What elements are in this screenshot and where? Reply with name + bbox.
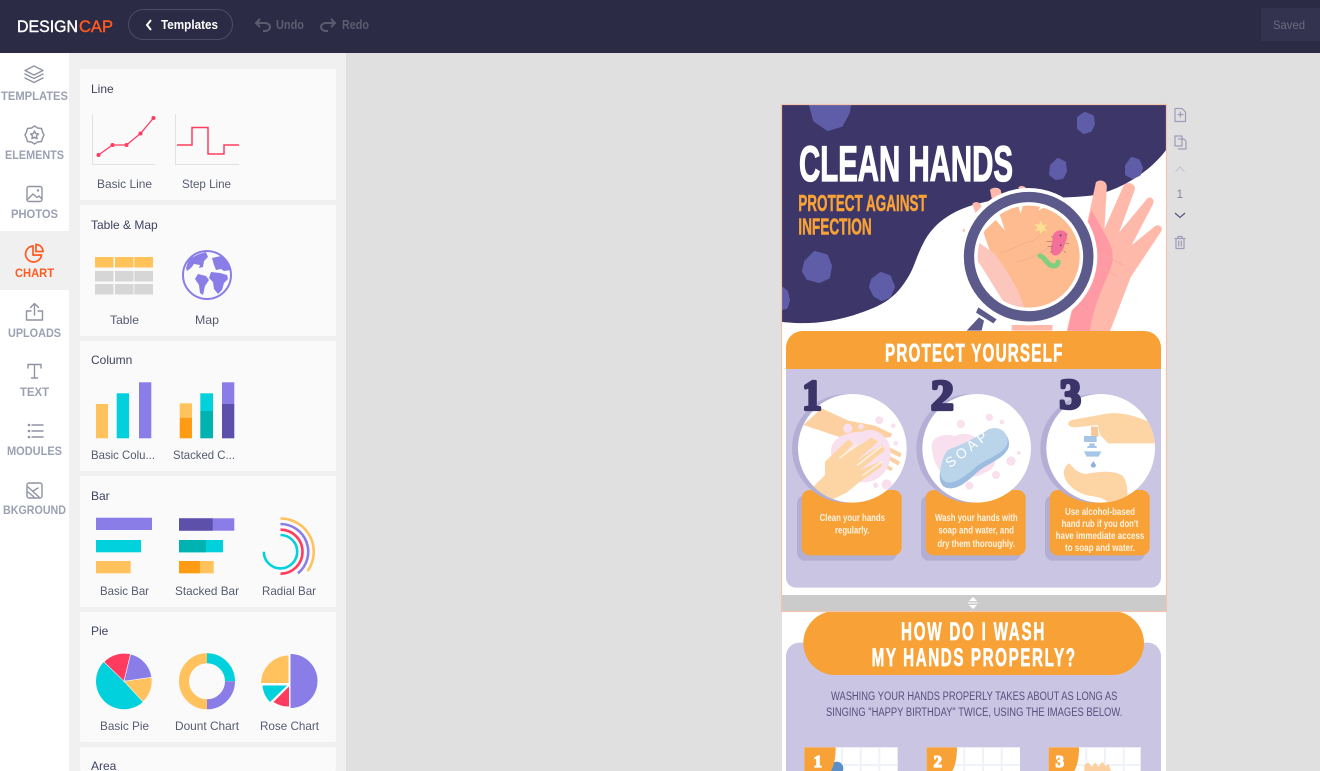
undo [256, 18, 304, 32]
nav: elements: ELEMENTS [5, 148, 64, 162]
icon: move up [1176, 167, 1184, 172]
basic line chart: Basic Line [97, 177, 152, 191]
panel: bar charts: Bar [91, 489, 110, 503]
basic bar chart [96, 518, 152, 598]
numeral: 2 [931, 372, 954, 419]
stacked column chart [173, 382, 235, 462]
magnifying glass [960, 186, 1097, 331]
numeral: 1 [802, 372, 822, 419]
basic line chart [92, 114, 239, 191]
nav: templates: TEMPLATES [1, 89, 68, 103]
stacked bar chart: Stacked Bar [175, 584, 239, 598]
step tile 2 [927, 747, 1020, 771]
donut chart [175, 658, 240, 733]
panel: column charts [80, 341, 336, 471]
basic pie chart [96, 653, 152, 733]
chart type panel [69, 53, 346, 771]
fingertips behind lens [962, 186, 1026, 233]
step tile 1: 1 [814, 752, 822, 771]
panel: line charts: Line [91, 82, 114, 96]
table icon [95, 257, 153, 327]
redo [321, 18, 369, 32]
caption: hand rub if you don't [1062, 519, 1139, 530]
map globe icon [183, 251, 231, 327]
table icon: Table [110, 313, 139, 327]
panel: column charts: Column [91, 353, 132, 367]
nav: templates [1, 66, 68, 103]
nav: chart active [15, 244, 55, 280]
radial bar chart [262, 518, 316, 598]
orange pill heading: HOW DO I WASH [901, 618, 1044, 646]
caption [820, 513, 885, 537]
nav: background [3, 483, 66, 517]
subtitle [799, 194, 927, 235]
title: CLEAN HANDS [799, 136, 1013, 192]
logo: DESIGN [17, 17, 78, 36]
panel: protect yourself [786, 331, 1161, 588]
nav: text: TEXT [20, 385, 50, 399]
step tile 2: 2 [934, 752, 942, 771]
templates button: Templates [161, 18, 218, 32]
orange pill heading: MY HANDS PROPERLY? [872, 644, 1075, 672]
step line chart [177, 128, 239, 191]
step tile 1 [804, 747, 898, 771]
caption [1056, 507, 1145, 554]
icon: sanitizer hands [1064, 413, 1157, 506]
saved status: Saved [1273, 18, 1305, 32]
caption [935, 513, 1018, 550]
step tile 3: 3 [1056, 752, 1064, 771]
icon: add page [1175, 108, 1186, 122]
subtitle: PROTECT AGAINST [798, 190, 927, 216]
panel: how do I wash [786, 611, 1161, 771]
numeral: 3 [1060, 372, 1081, 419]
nav: uploads [8, 304, 61, 340]
design page sheet [782, 105, 1166, 771]
icon: washing hands [803, 408, 902, 501]
panel: bar charts [80, 476, 336, 607]
nav: text [20, 364, 50, 399]
panel: area charts heading [80, 747, 336, 771]
panel: table and map: Table & Map [91, 218, 158, 232]
caption: regularly. [835, 526, 869, 537]
icon: move down [1175, 213, 1185, 218]
nav: modules [7, 424, 62, 458]
nav: photos: PHOTOS [11, 207, 58, 221]
rose chart: Rose Chart [260, 719, 320, 733]
redo: Redo [342, 18, 369, 32]
step line chart: Step Line [182, 177, 231, 191]
page action icons [1175, 108, 1186, 248]
nav: uploads: UPLOADS [8, 326, 61, 340]
caption: to soap and water. [1065, 543, 1135, 554]
step 1 [792, 372, 907, 561]
orange pill heading [803, 611, 1144, 675]
stacked column chart: Stacked C... [173, 448, 235, 462]
left navigation sidebar [0, 53, 69, 771]
panel: pie charts [80, 612, 336, 742]
canvas workspace background [346, 53, 1320, 771]
basic bar chart: Basic Bar [100, 584, 149, 598]
intro text: SINGING "HAPPY BIRTHDAY" TWICE, USING THE IMAGES BELOW. [826, 705, 1122, 719]
donut chart: Dount Chart [175, 719, 240, 733]
undo: Undo [276, 18, 304, 32]
icon: soap bar [932, 414, 1021, 490]
hero section: clean hands [782, 105, 1166, 331]
caption: Wash your hands with [935, 513, 1018, 524]
map globe icon: Map [195, 313, 219, 327]
caption: soap and water, and [938, 526, 1014, 537]
basic column chart [91, 382, 155, 462]
lilac body [786, 643, 1161, 771]
saved status [1261, 8, 1320, 41]
logo [17, 17, 113, 36]
logo: CAP [79, 17, 113, 36]
radial bar chart: Radial Bar [262, 584, 316, 598]
nav: background: BKGROUND [3, 503, 66, 517]
nav: elements [5, 126, 64, 162]
subtitle: INFECTION [798, 213, 872, 239]
orange header [786, 331, 1161, 369]
heading: PROTECT YOURSELF [885, 340, 1062, 368]
panel: table and map [80, 205, 336, 336]
panel: pie charts: Pie [91, 624, 109, 638]
intro text [826, 689, 1122, 719]
intro text: WASHING YOUR HANDS PROPERLY TAKES ABOUT AS LONG AS [831, 689, 1117, 703]
dark wave background [782, 105, 1166, 323]
nav: chart active: CHART [15, 266, 55, 280]
caption: have immediate access [1056, 531, 1145, 542]
icon: duplicate page [1175, 136, 1186, 149]
caption: Use alcohol-based [1065, 507, 1135, 518]
step 2 [916, 372, 1031, 561]
panel: line charts [80, 69, 336, 200]
step tile 3 [1049, 747, 1141, 771]
top toolbar [0, 0, 1320, 53]
rose chart [260, 654, 320, 733]
page resize handle [782, 595, 1166, 611]
decorative germ blobs [782, 105, 1141, 308]
nav: photos [11, 186, 58, 221]
templates button [128, 10, 232, 40]
icon: soap bar: SOAP [942, 426, 993, 471]
basic pie chart: Basic Pie [100, 719, 149, 733]
caption: Clean your hands [820, 513, 885, 524]
caption: dry them thoroughly. [937, 539, 1015, 550]
right hand illustration [1068, 181, 1161, 331]
stacked bar chart [175, 518, 239, 598]
step 3 [1040, 372, 1157, 561]
nav: modules: MODULES [7, 444, 62, 458]
icon: delete page [1175, 236, 1185, 248]
selected page outline [782, 104, 1166, 612]
basic column chart: Basic Colu... [91, 448, 155, 462]
lilac body [786, 360, 1161, 588]
page number: 1 [1176, 187, 1184, 201]
